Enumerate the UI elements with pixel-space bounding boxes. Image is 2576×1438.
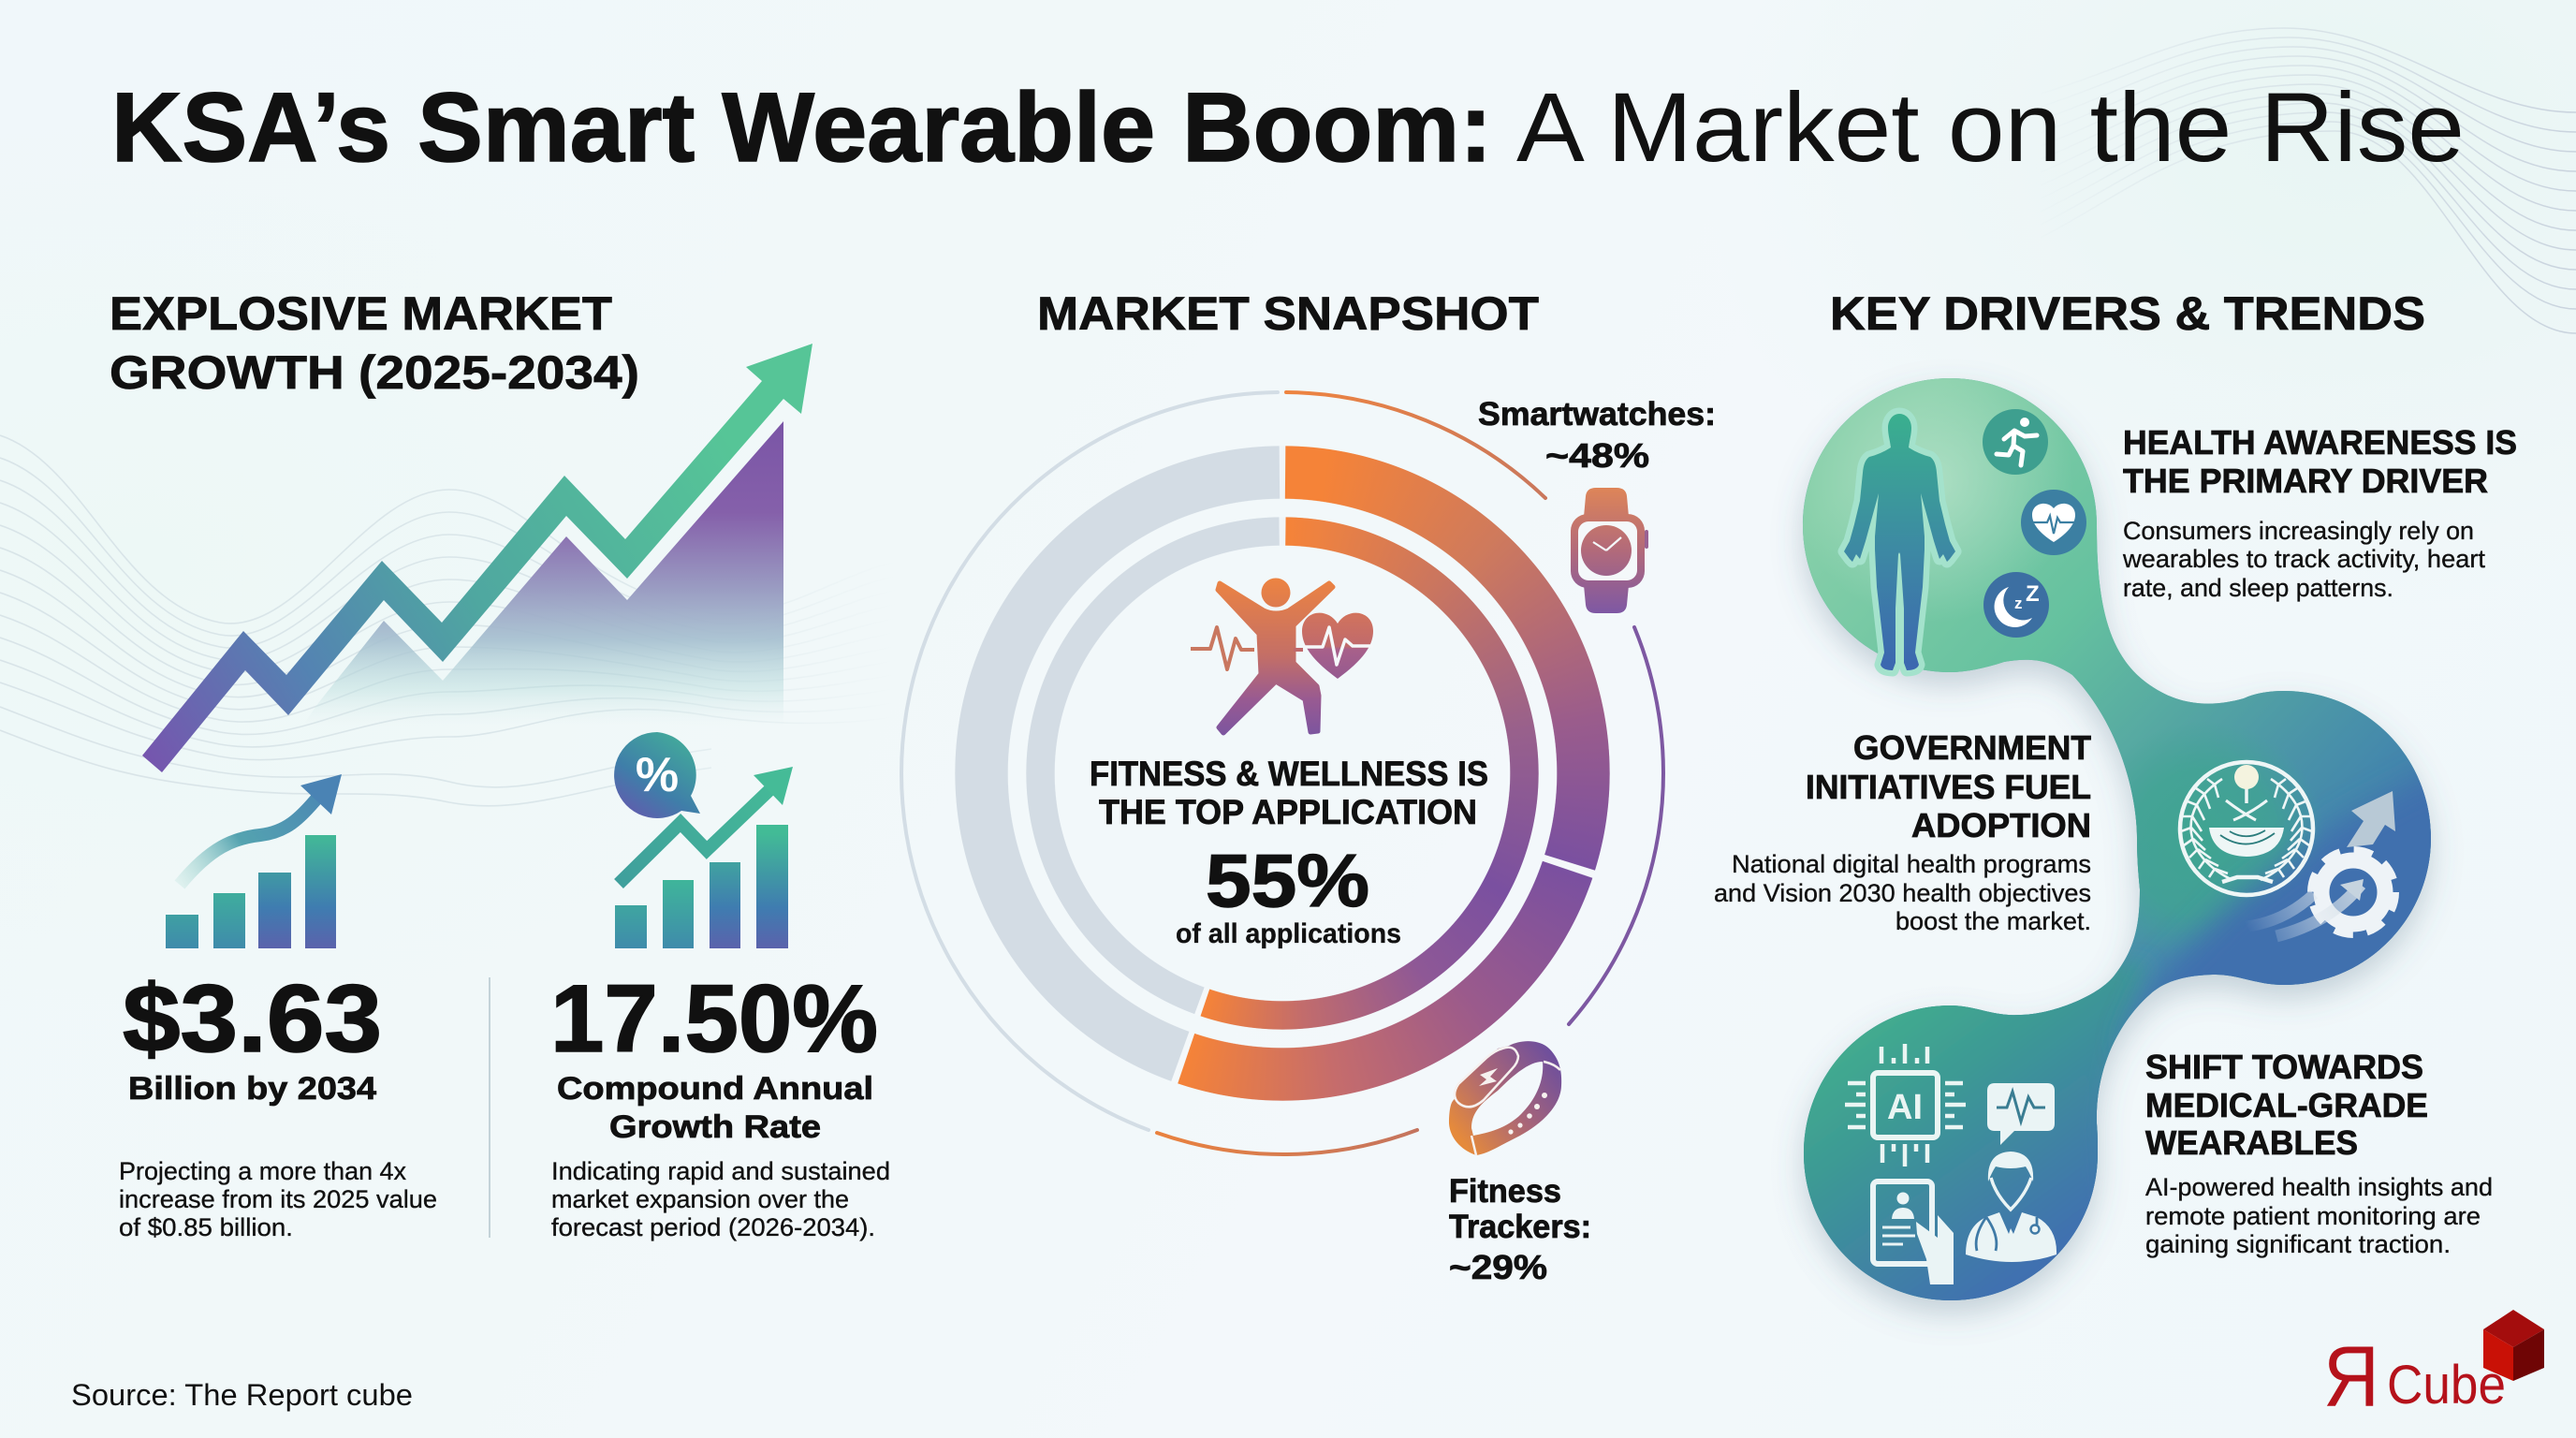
panel: market snapshot — [901, 287, 1716, 1286]
stat: growth rate: Growth Rate — [609, 1109, 821, 1145]
icon: ai chip — [1845, 1044, 1966, 1167]
text: government initiatives: ADOPTION — [1911, 806, 2091, 844]
text: market value description: of $0.85 billion. — [119, 1213, 293, 1241]
rising trend arrow — [142, 344, 812, 772]
text: medical-grade wearables: AI-powered health insights and — [2145, 1173, 2493, 1201]
text: market value description: increase from its 2025 value — [119, 1185, 437, 1213]
icon: sleep: Z — [2026, 581, 2040, 607]
stat: growth rate: Compound Annual — [557, 1071, 873, 1107]
label: smartwatches: ~48% — [1545, 436, 1649, 475]
label: fitness trackers: Fitness — [1449, 1173, 1561, 1210]
stat: market value: $3.63 — [123, 965, 382, 1072]
label: smartwatches: Smartwatches: — [1478, 396, 1716, 433]
heading: market snapshot: MARKET SNAPSHOT — [1037, 287, 1539, 340]
text: health awareness — [2122, 423, 2517, 602]
text: medical-grade wearables: remote patient monitoring are — [2145, 1202, 2481, 1230]
text: medical-grade wearables: WEARABLES — [2145, 1123, 2358, 1162]
text: growth rate description — [551, 1157, 890, 1241]
title — [111, 73, 2465, 183]
icon: gear and growth arrows — [2245, 791, 2395, 936]
source note: Source: The Report cube — [71, 1378, 413, 1412]
center text: top application: 55% — [1206, 839, 1369, 922]
icon: chat pulse — [1987, 1083, 2055, 1145]
text: medical-grade wearables: gaining significant traction. — [2145, 1230, 2451, 1258]
icon: human body — [1844, 414, 1955, 670]
connected blob background — [1791, 378, 2443, 1326]
heading: explosive market growth — [110, 287, 639, 399]
label: fitness trackers: ~29% — [1449, 1248, 1547, 1286]
title: A Market on the Rise — [1516, 73, 2465, 183]
donut chart: outer ring — [955, 446, 1610, 1101]
text: health awareness: Consumers increasingly rely on — [2123, 517, 2474, 545]
heading: explosive market growth: EXPLOSIVE MARKET — [110, 287, 612, 340]
text: government initiatives — [1714, 728, 2091, 935]
panel: explosive market growth — [110, 287, 890, 1241]
icon: heart rate — [2021, 490, 2086, 555]
label: fitness trackers: Trackers: — [1449, 1209, 1591, 1245]
text: medical-grade wearables: MEDICAL-GRADE — [2145, 1086, 2428, 1124]
icon: bar chart with zigzag arrow — [615, 767, 793, 948]
icon: bar chart with curved arrow — [166, 774, 342, 948]
icon: doctor — [1966, 1152, 2056, 1262]
text: government initiatives: and Vision 2030 health objectives — [1714, 879, 2091, 907]
text: health awareness: wearables to track activity, heart — [2122, 545, 2486, 573]
center text: top application: of all applications — [1176, 918, 1401, 949]
title: KSA’s Smart Wearable Boom: — [111, 73, 1492, 183]
text: market value description: Projecting a more than 4x — [119, 1157, 406, 1185]
text: health awareness: rate, and sleep patterns. — [2123, 574, 2393, 602]
icon: fitness tracker band — [1449, 1041, 1561, 1155]
heading: explosive market growth: GROWTH (2025-2034) — [110, 346, 639, 399]
text: government initiatives: GOVERNMENT — [1853, 728, 2091, 767]
heading: key drivers and trends: KEY DRIVERS & TRENDS — [1830, 287, 2425, 340]
icon: ai chip: AI — [1887, 1088, 1923, 1127]
panel: key drivers and trends — [1714, 287, 2517, 1329]
stat: market value: Billion by 2034 — [128, 1071, 376, 1107]
text: health awareness: HEALTH AWARENESS IS — [2123, 423, 2517, 462]
icon: sleep — [1983, 572, 2049, 638]
icon: fitness person with heart — [1191, 579, 1373, 733]
center text: top application: FITNESS & WELLNESS IS — [1090, 755, 1488, 793]
text: market value description — [119, 1157, 437, 1241]
icon: saudi emblem — [2180, 762, 2313, 895]
logo: report cube: Cube — [2387, 1355, 2506, 1416]
icon: tablet with hand — [1873, 1181, 1954, 1284]
icon: sleep: z — [2014, 594, 2022, 612]
stat: market value — [123, 965, 382, 1107]
center text: top application: THE TOP APPLICATION — [1099, 793, 1477, 831]
icon: percent bubble: % — [636, 748, 679, 802]
outer thin arcs — [901, 392, 1663, 1154]
text: growth rate description: Indicating rapid and sustained — [551, 1157, 890, 1185]
text: growth rate description: market expansion over the — [551, 1185, 849, 1213]
text: growth rate description: forecast period (2026-2034). — [551, 1213, 875, 1241]
logo: report cube: Я — [2323, 1329, 2379, 1425]
stat: growth rate: 17.50% — [550, 965, 878, 1072]
text: government initiatives: National digital health programs — [1732, 850, 2091, 878]
text: medical-grade wearables: SHIFT TOWARDS — [2145, 1048, 2423, 1086]
text: medical-grade wearables — [2145, 1048, 2493, 1258]
text: health awareness: THE PRIMARY DRIVER — [2123, 462, 2488, 500]
text: government initiatives: INITIATIVES FUEL — [1806, 768, 2091, 806]
icon: running — [1983, 409, 2048, 475]
area chart fill — [300, 421, 783, 730]
logo: report cube — [2323, 1310, 2544, 1425]
icon: smartwatch — [1571, 488, 1648, 613]
label: smartwatches — [1478, 396, 1716, 475]
text: government initiatives: boost the market. — [1895, 907, 2091, 935]
label: fitness trackers — [1449, 1173, 1591, 1286]
donut chart: inner ring — [1026, 517, 1539, 1030]
stat: growth rate — [550, 965, 878, 1145]
icon: percent bubble — [614, 732, 700, 818]
center text: top application — [1090, 755, 1488, 949]
